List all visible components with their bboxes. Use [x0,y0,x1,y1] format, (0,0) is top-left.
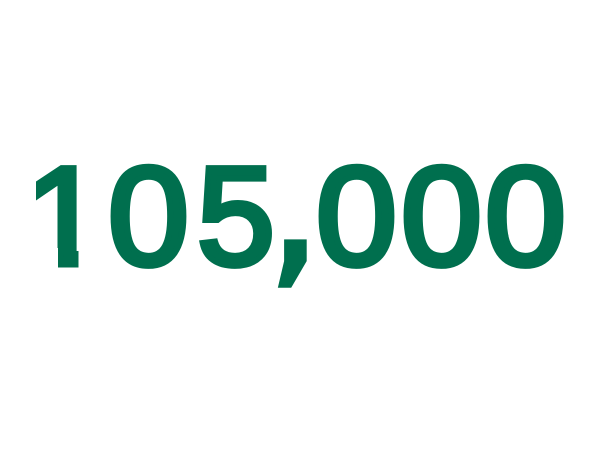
big number: 1 [24,139,105,295]
big number: , [271,132,320,302]
big number [36,164,564,288]
big number: 0 [316,139,397,295]
big number: 0 [108,139,189,295]
big number: 0 [401,139,482,295]
big number: 0 [485,139,566,295]
big number: 5 [197,138,275,294]
